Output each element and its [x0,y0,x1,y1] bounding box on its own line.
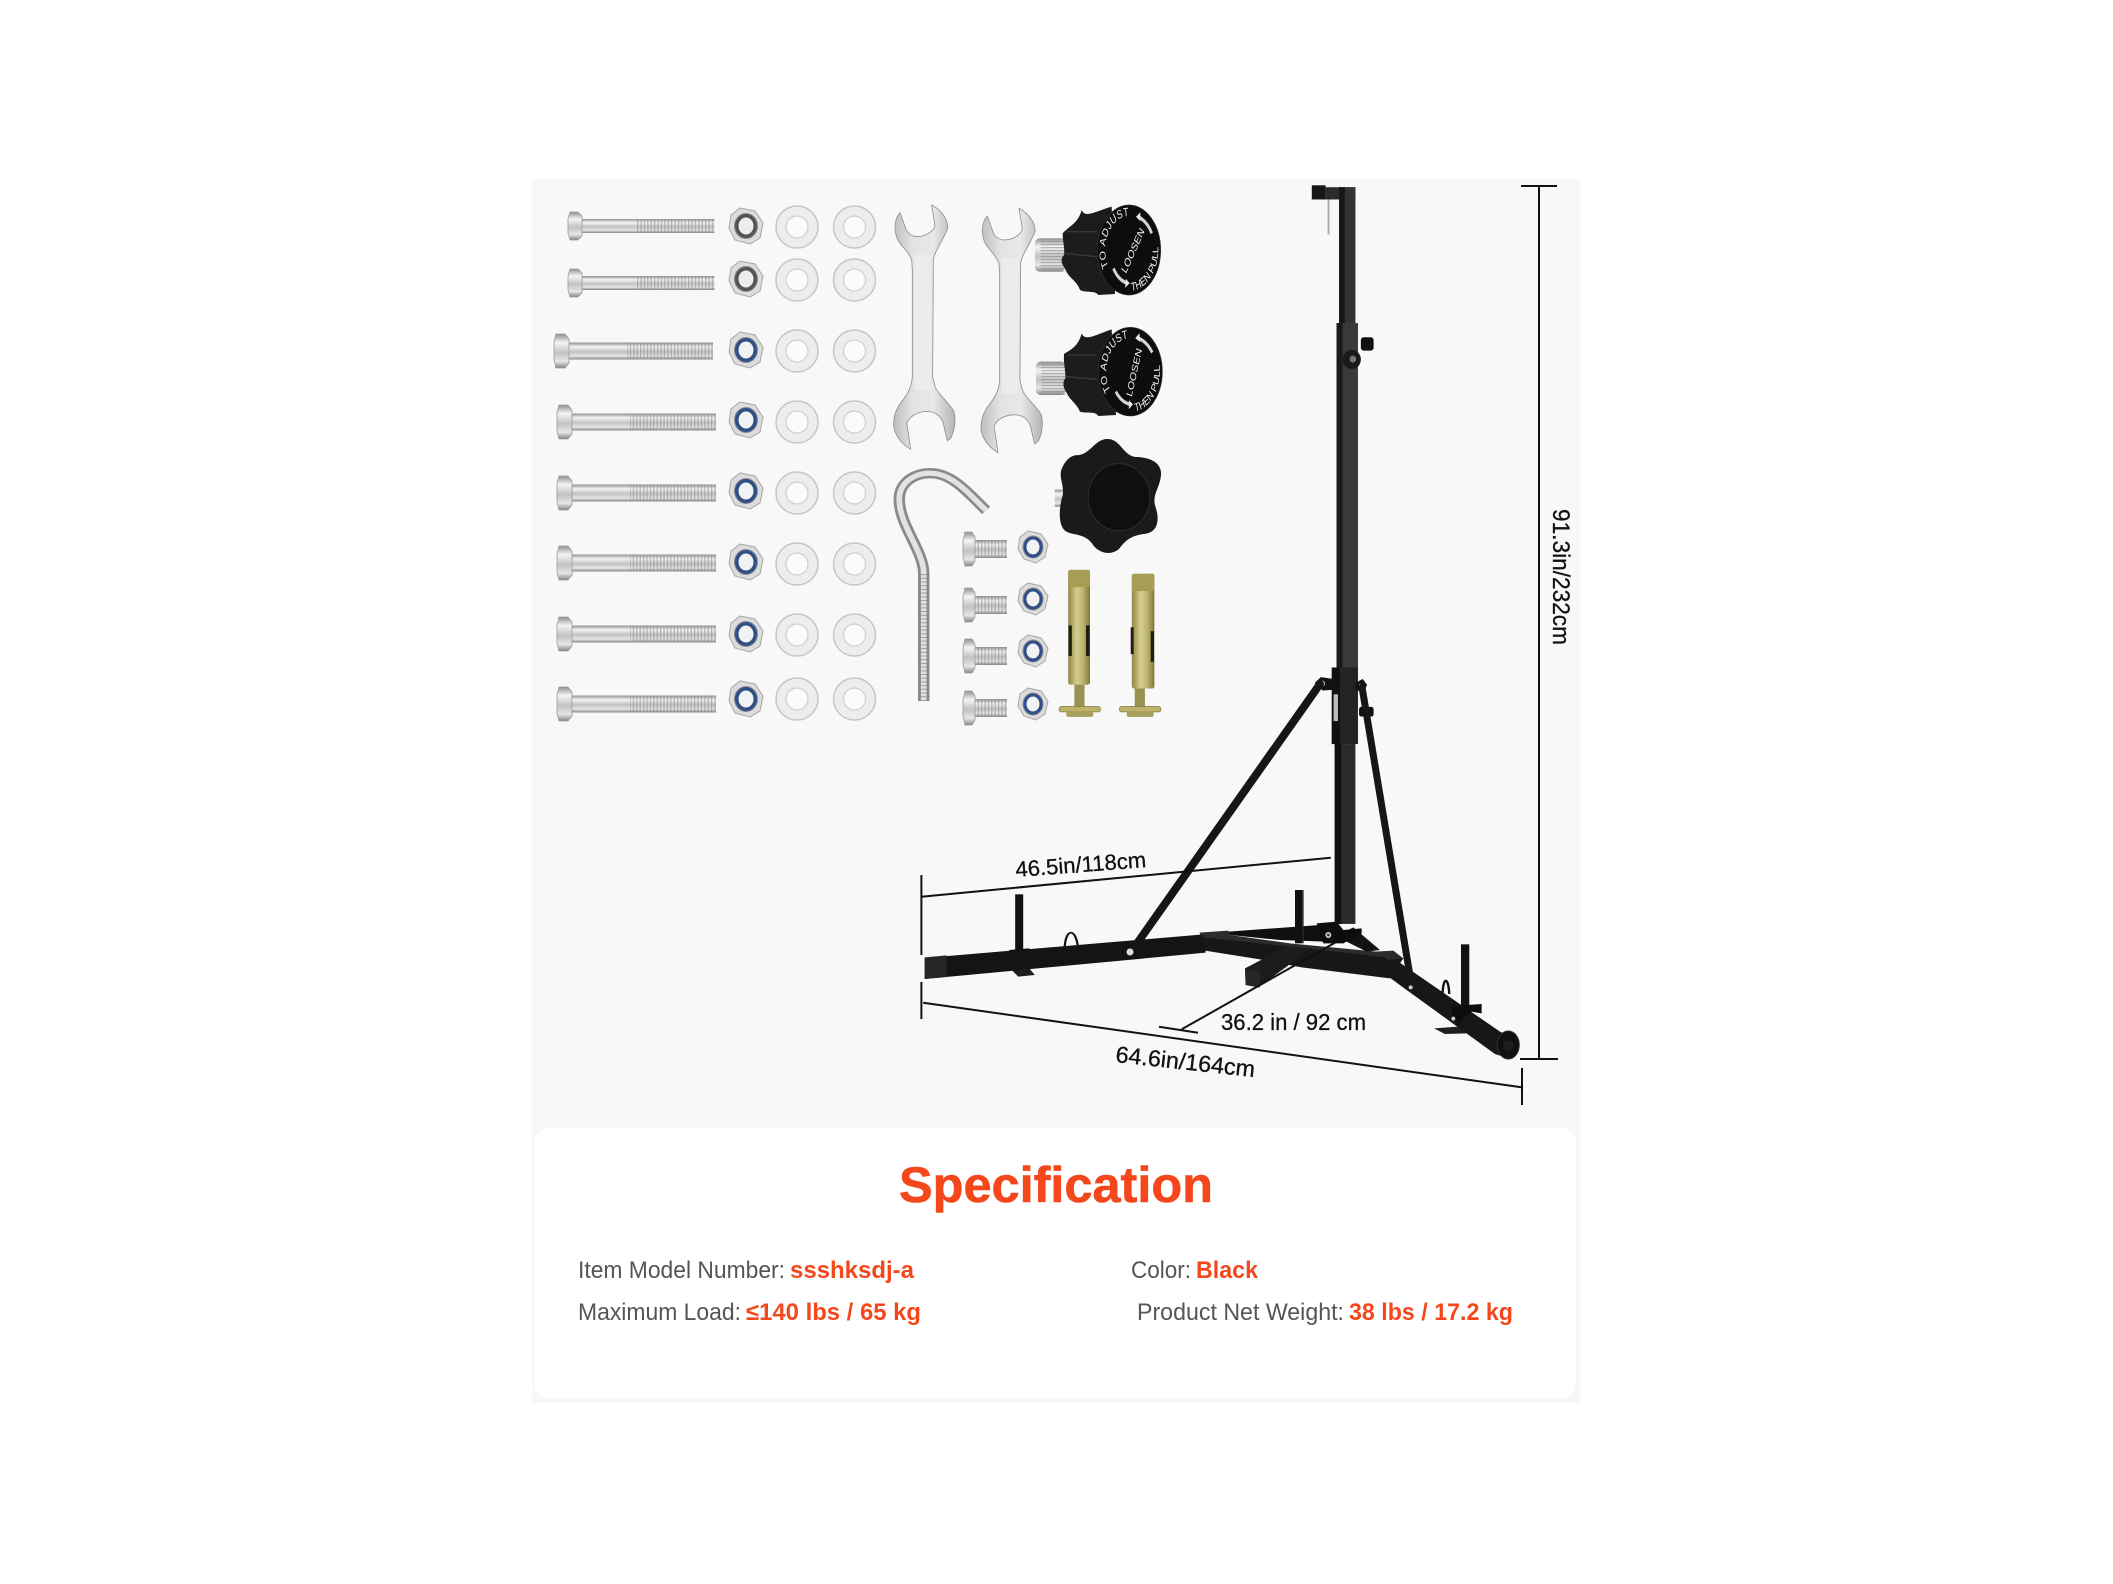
icon: pull knob one: THEN PULL [1130,247,1158,291]
rear support braces [1131,684,1412,988]
background panel [532,179,1580,1403]
depth dimension: 46.5in/118cm [921,847,1331,1019]
icon: pull knob two: THEN PULL [1134,365,1160,411]
spec: color: Color: [1131,1257,1191,1284]
hardware parts: short bolt nuts [1018,531,1048,720]
heading: Specification: Specification [899,1157,1213,1213]
panel: specification card [534,1128,1576,1398]
spec value: maximum load: ≤140 lbs / 65 kg [746,1299,921,1326]
spec: maximum load: Maximum Load: [578,1299,741,1326]
icon: pull knob two: TO ADJUST [1100,330,1127,394]
hardware parts: lock nuts [729,208,763,717]
height dimension: 91.3in/232cm [1520,186,1574,1059]
spec value: color: Black [1196,1257,1259,1284]
spec: item model number: Item Model Number: [578,1257,785,1284]
hardware parts: short bolts [963,532,1007,725]
spec value: model number: ssshksdj-a [790,1257,915,1284]
depth dimension: 36.2 in / 92 cm: 36.2 in / 92 cm [1221,1009,1366,1035]
spec value: product net weight: 38 lbs / 17.2 kg [1349,1299,1513,1326]
icon: star knob [1055,439,1161,553]
icon: pull knob two [1036,327,1163,416]
spec: product net weight: Product Net Weight: [1137,1299,1344,1326]
width dimension: 64.6in/164cm: 64.6in/164cm [1114,1041,1256,1082]
hardware parts: two wrenches [894,205,1042,453]
icon: pull knob one: TO ADJUST [1100,208,1128,270]
height dimension: 91.3in/232cm: 91.3in/232cm [1547,509,1574,645]
depth dimension: 46.5in/118cm: 46.5in/118cm [1015,847,1147,882]
hardware parts: flat washers [776,206,876,720]
icon: pull knob two: LOOSEN [1125,347,1144,398]
icon: pull knob one: LOOSEN [1120,226,1147,276]
hardware parts: long bolts [554,212,716,721]
icon: expansion anchors [1059,570,1161,717]
stand base: left arm [1009,894,1078,977]
stand base frame [925,890,1519,1059]
width dimension: 64.6in/164cm [923,1003,1522,1105]
hardware parts: ceiling hook [899,473,986,701]
icon: pull knob one [1035,204,1161,296]
vertical mast of the stand [1312,185,1374,924]
brace pin on left arm [1126,948,1134,956]
depth dimension: 36.2 in / 92 cm [1159,942,1366,1035]
